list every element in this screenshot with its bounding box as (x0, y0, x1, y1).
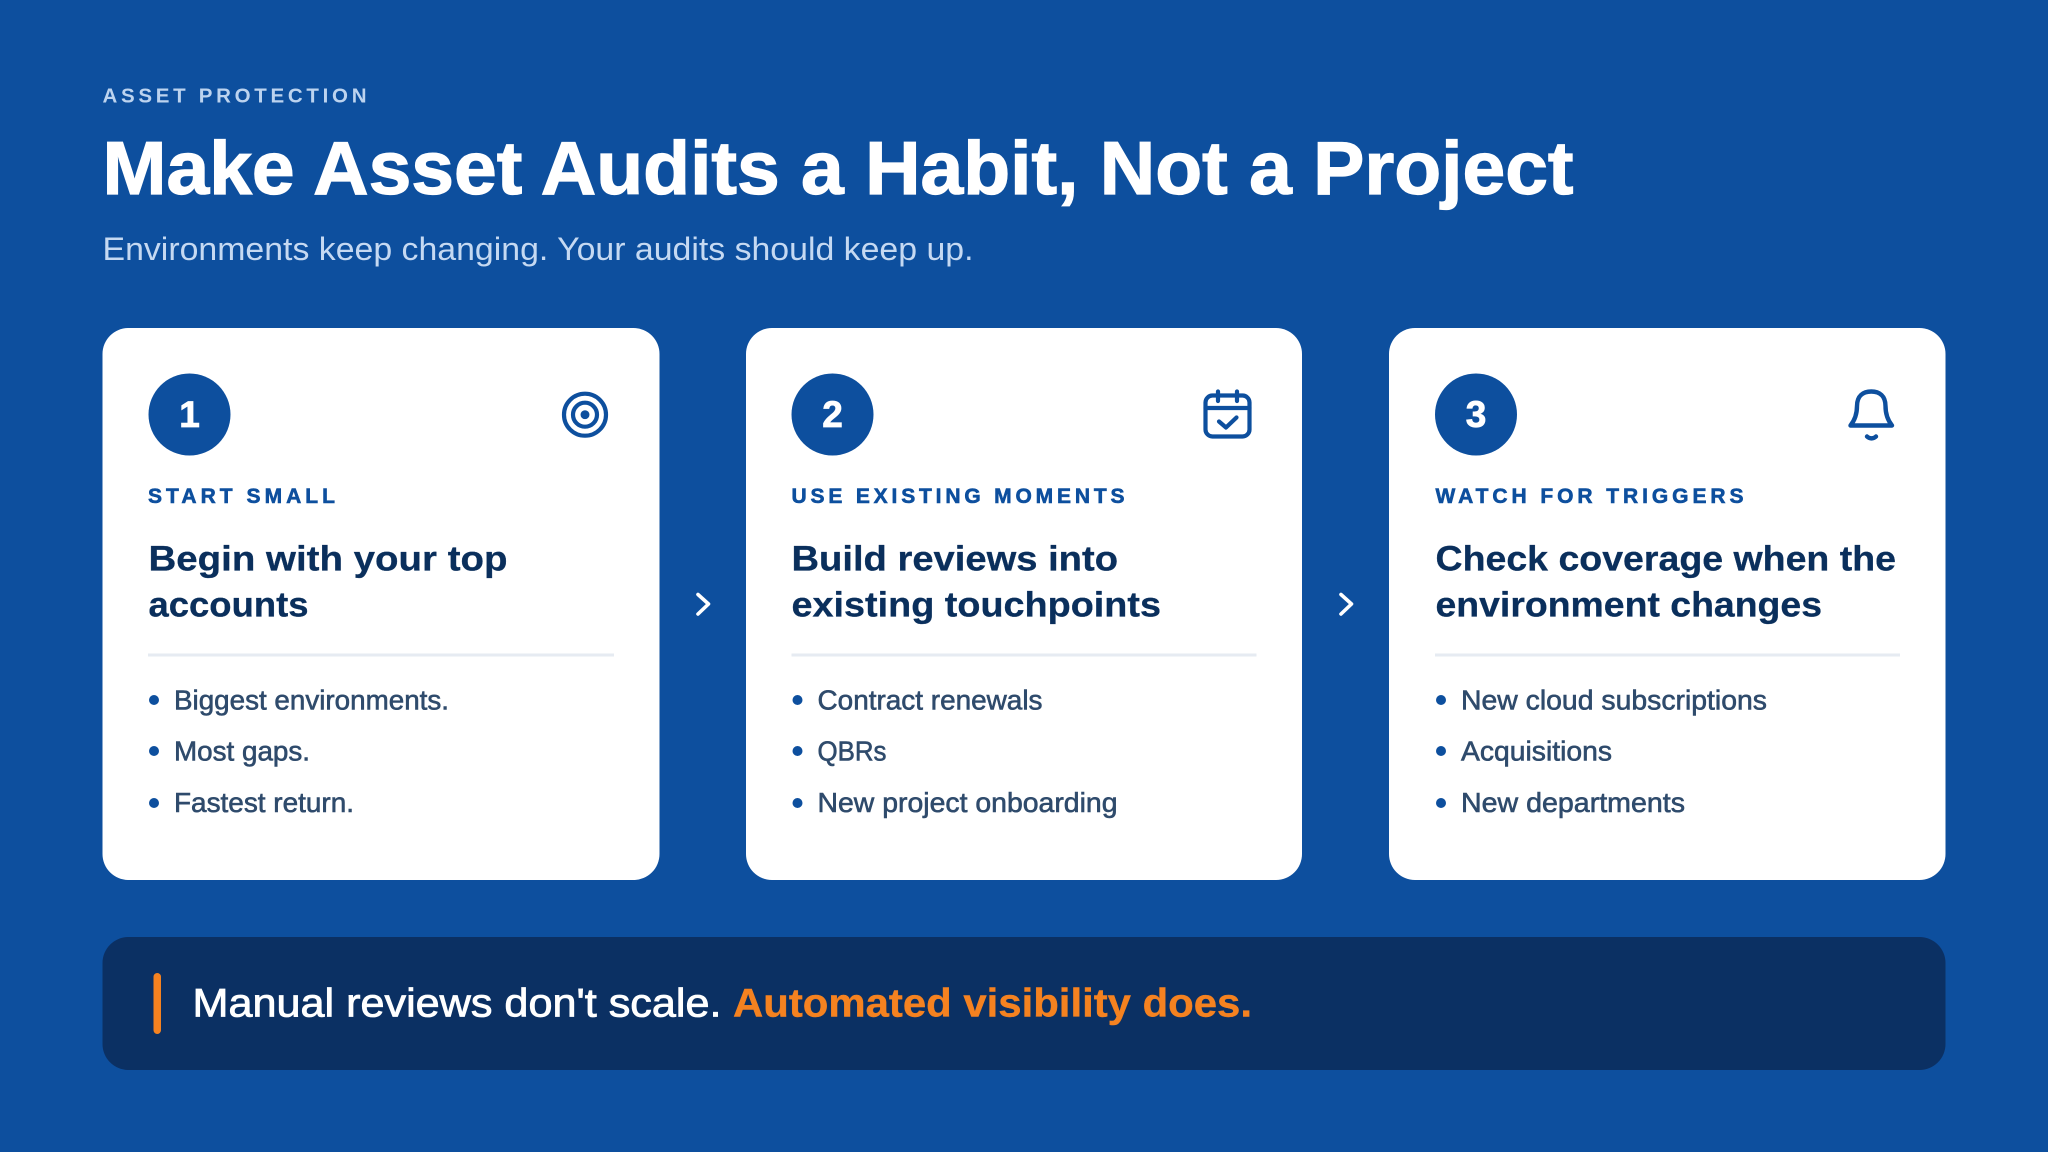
bullet list (1436, 684, 1767, 818)
heading (1436, 538, 1896, 624)
bullet list: Acquisitions (1461, 736, 1612, 766)
heading (792, 538, 1161, 624)
bullet list (149, 684, 449, 818)
bullet list: New project onboarding (818, 787, 1118, 818)
icon: target (564, 394, 606, 436)
panel: step 1 start small (102, 328, 660, 880)
icon: bell (1850, 392, 1892, 438)
step number 3: 3 (1466, 394, 1486, 435)
panel: step 2 use existing moments (746, 328, 1302, 880)
bullet list: QBRs (818, 736, 886, 766)
step number 1: 1 (179, 394, 200, 435)
label: start small: START SMALL (148, 485, 335, 508)
label: watch for triggers: WATCH FOR TRIGGERS (1436, 485, 1744, 508)
heading: Build reviews into (792, 538, 1118, 578)
callout text: manual reviews: Manual reviews don't scale. (192, 982, 722, 1026)
bullet list: Most gaps. (174, 736, 310, 766)
eyebrow: ASSET PROTECTION (102, 84, 366, 108)
bullet list: New cloud subscriptions (1461, 684, 1767, 716)
heading: Check coverage when the (1436, 538, 1896, 578)
heading: environment changes (1436, 584, 1822, 624)
step number 2: 2 (822, 394, 843, 435)
step number 1 (148, 374, 230, 456)
bullet list: Fastest return. (174, 787, 354, 818)
label: use existing moments: USE EXISTING MOMENTS (792, 485, 1124, 508)
icon: calendar (1206, 392, 1250, 436)
step number 3 (1435, 374, 1517, 456)
callout banner (102, 937, 1946, 1070)
arrow: step 1 to 2 (698, 594, 708, 614)
heading: Begin with your top (148, 538, 508, 578)
heading: accounts (148, 584, 308, 624)
bullet list: Contract renewals (818, 684, 1042, 716)
subtitle: Environments keep changing. Your audits should keep up. (102, 231, 974, 267)
bullet list: New departments (1461, 787, 1685, 818)
accent bar (154, 973, 161, 1034)
heading: existing touchpoints (792, 584, 1161, 624)
panel: step 3 watch for triggers (1389, 328, 1946, 880)
bullet list: Biggest environments. (174, 684, 449, 716)
title: Make Asset Audits a Habit, Not a Project (102, 126, 1574, 210)
heading (148, 538, 508, 624)
callout text: automated visibility: Automated visibility does. (733, 982, 1252, 1026)
bullet list (792, 684, 1118, 818)
arrow: step 2 to 3 (1341, 594, 1352, 614)
step number 2 (792, 374, 874, 456)
